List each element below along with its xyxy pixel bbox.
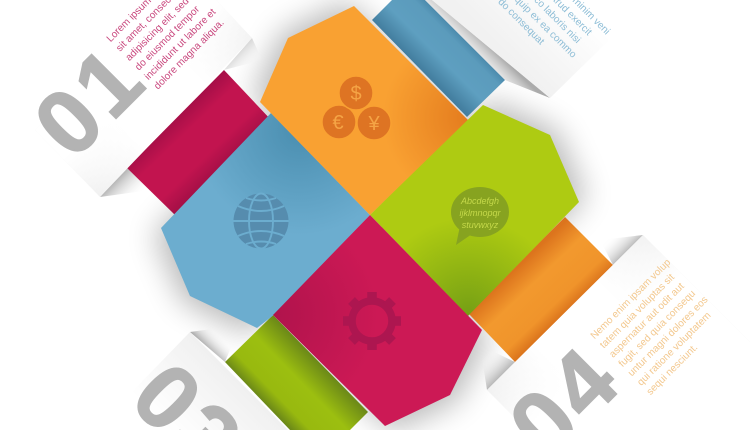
text block 02 [496,0,612,75]
strip: lime green [225,315,368,430]
strip: magenta [127,70,273,215]
panel 01 [15,0,252,197]
number 01: 01 [15,26,166,176]
icon: speech bubble: Abcdefgh [460,196,499,206]
icon: speech bubble: ijklmnopqr [459,208,502,218]
panel 04 [487,235,750,430]
text block 01: dolore magna aliqua. [152,18,227,92]
paper shadow beside blue strip [425,0,550,98]
icon: speech bubble [451,187,509,245]
text block 01 [105,0,228,92]
text block 04: Nemo enim ipsam volup [589,257,673,342]
shape: orange money [260,6,469,215]
icon: coins: $ [350,83,362,105]
text block 04: untur magni dolores eos [626,295,711,379]
panel 02 [432,0,640,98]
text block 04: tatem quia voluptas sit [598,272,677,351]
shape: green language [370,105,579,316]
soft shadows around the four shapes [100,1,643,430]
strip: orange [468,217,613,362]
text block 04 [589,257,729,398]
text block 01: do eiusmod tempor [133,4,203,73]
icon: gear [343,292,401,350]
strip: blue [372,0,505,117]
text block 04: qui ratione voluptatem [635,310,714,388]
text block 01: incididunt ut labore et [143,7,218,82]
icon: coins [322,76,391,140]
shape: blue globe [161,113,370,328]
icon: globe [234,194,288,248]
shape: magenta gear [273,215,482,426]
text block 04: sequi nesciunt. [645,342,700,398]
text block 04: fugit, sed quia consequ [617,288,698,370]
icon: coins: ¥ [367,113,380,135]
icon: coins: € [332,112,344,134]
panel 03 [95,332,288,430]
text block 04: aspernatur aut odit aut [607,281,687,360]
icon: speech bubble: stuvwxyz [462,220,499,230]
